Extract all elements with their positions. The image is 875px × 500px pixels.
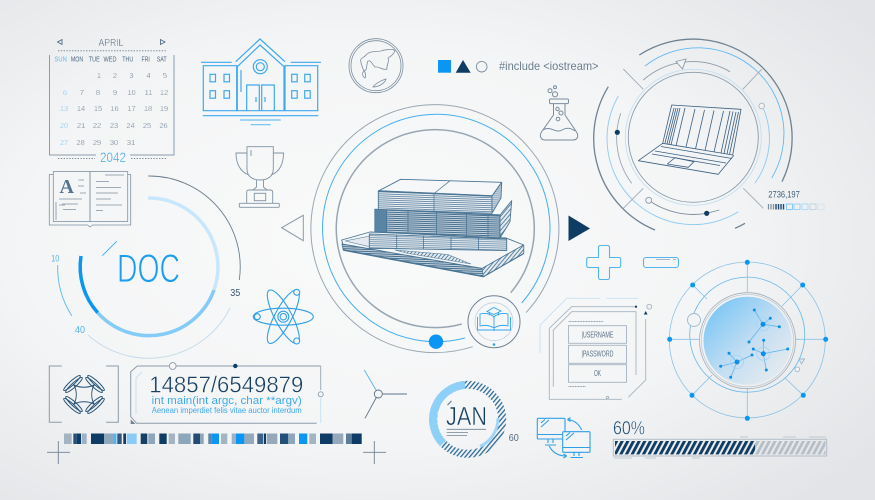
stack of books (342, 179, 524, 276)
calendar weekdays: SUN (55, 54, 67, 64)
icon: open book with letter A (49, 172, 131, 227)
icon: three-way connector (364, 370, 407, 418)
calendar dates: 11 (145, 88, 152, 97)
calendar dates: 4 (146, 71, 151, 80)
gauge label JAN: JAN (446, 401, 487, 431)
progress track (613, 437, 827, 458)
legend shapes and code label (438, 59, 598, 73)
calendar dates: 1 (97, 71, 101, 80)
calendar dates: 24 (126, 121, 135, 130)
calendar dates: 21 (77, 121, 85, 130)
calendar dates: 5 (163, 71, 167, 80)
gauge tick 35: 35 (230, 288, 241, 299)
HUD level meter (768, 204, 824, 210)
icon: flask (540, 86, 578, 140)
login panel (540, 298, 652, 399)
progress bar 60% (613, 418, 827, 458)
icon: two monitors syncing (537, 418, 590, 458)
icon: school building (201, 39, 321, 125)
calendar dates: 2 (113, 71, 117, 80)
readout number: 14857/6549879 (149, 371, 303, 397)
calendar dates: 26 (159, 121, 168, 130)
OK button: OK (594, 369, 601, 378)
radar network chart (667, 260, 828, 421)
calendar weekdays: THU (122, 54, 133, 64)
calendar dates: 28 (76, 138, 85, 147)
gauge: DOC progress ring (51, 176, 241, 358)
readout caption: Aenean imperdiet felis vitae auctor interdum (152, 405, 302, 415)
calendar dates: 18 (144, 104, 152, 113)
HUD reading 2736,197: 2736,197 (768, 190, 800, 200)
calendar dates: 27 (60, 138, 68, 147)
code label: #include <iostream> (499, 59, 598, 73)
arrow: left outline triangle (282, 215, 303, 241)
calendar dates: 20 (60, 121, 68, 130)
calendar dates: 7 (80, 88, 84, 97)
calendar dates: 14 (77, 104, 85, 113)
calendar dates: 23 (110, 121, 118, 130)
calendar dates: 16 (110, 104, 119, 113)
gauge label DOC: DOC (117, 247, 180, 291)
gauge tick 10: 10 (51, 254, 59, 264)
readout code line: int main(int argc, char **argv) (152, 395, 302, 407)
readout frame (131, 363, 323, 424)
middle book (375, 201, 512, 238)
calendar month header: APRIL (98, 37, 124, 49)
radar inner network (719, 308, 789, 379)
central ring with books (311, 105, 559, 353)
icon: trophy (236, 147, 284, 207)
radar blue disc (704, 297, 792, 385)
HUD markers (615, 59, 764, 216)
password field: |PASSWORD (582, 348, 614, 358)
calendar dates: 13 (60, 104, 68, 113)
calendar dates: 25 (143, 121, 151, 130)
icon: open book with letter A: A (59, 176, 74, 198)
arrow: right navy triangle (568, 216, 590, 241)
radar markers (688, 314, 804, 372)
icon: laptop (638, 105, 741, 174)
radar rings and spokes (669, 262, 826, 418)
calendar dates: 22 (93, 121, 101, 130)
icon: plus (587, 246, 621, 280)
calendar dates: 6 (63, 88, 67, 97)
blue progress dot (429, 334, 443, 349)
progress value: 60% (613, 418, 645, 439)
calendar weekdays: SAT (157, 54, 167, 64)
lower block of pages (369, 234, 507, 250)
calendar dates: 19 (160, 104, 168, 113)
calendar dates: 15 (94, 104, 102, 113)
badge: book and graduation cap (468, 296, 520, 348)
login frame lines (540, 298, 652, 399)
HUD arcs (594, 39, 792, 230)
calendar weekdays: FRI (142, 54, 150, 64)
code readout panel (131, 363, 323, 424)
calendar dates: 8 (96, 88, 100, 97)
top book (378, 179, 502, 213)
barcode strip (64, 434, 362, 444)
icon: drone in brackets (49, 366, 118, 422)
calendar weekdays: WED (104, 54, 117, 64)
icon: outline circle (476, 61, 487, 72)
gauge tick 40: 40 (75, 325, 85, 336)
laptop radial HUD (594, 39, 824, 230)
calendar dates: 29 (93, 138, 101, 147)
icon: atom (253, 286, 313, 347)
username field: |USERNAME (582, 330, 614, 340)
icon: globe (349, 39, 403, 93)
icon: navy triangle (456, 60, 471, 73)
calendar weekdays (55, 54, 167, 64)
gauge value 60: 60 (509, 433, 519, 444)
crosshair markers (47, 441, 386, 464)
calendar dates: 3 (129, 71, 134, 80)
calendar dates: 12 (160, 88, 168, 97)
radar outer nodes (667, 260, 828, 421)
calendar dates (60, 71, 168, 147)
icon: blue square (438, 60, 451, 73)
calendar dates: 10 (127, 88, 136, 97)
bottom book (342, 232, 524, 276)
calendar weekdays: MON (71, 54, 83, 64)
gauge: JAN ring (433, 385, 519, 454)
icon: minus (644, 258, 678, 268)
calendar weekdays: TUE (89, 54, 100, 64)
calendar dates: 31 (127, 138, 135, 147)
calendar dates: 30 (110, 138, 118, 147)
calendar dates: 17 (127, 104, 136, 113)
concentric rings (311, 105, 559, 353)
calendar year: 2042 (100, 149, 126, 165)
calendar panel (50, 37, 174, 165)
calendar dates: 9 (113, 88, 117, 97)
